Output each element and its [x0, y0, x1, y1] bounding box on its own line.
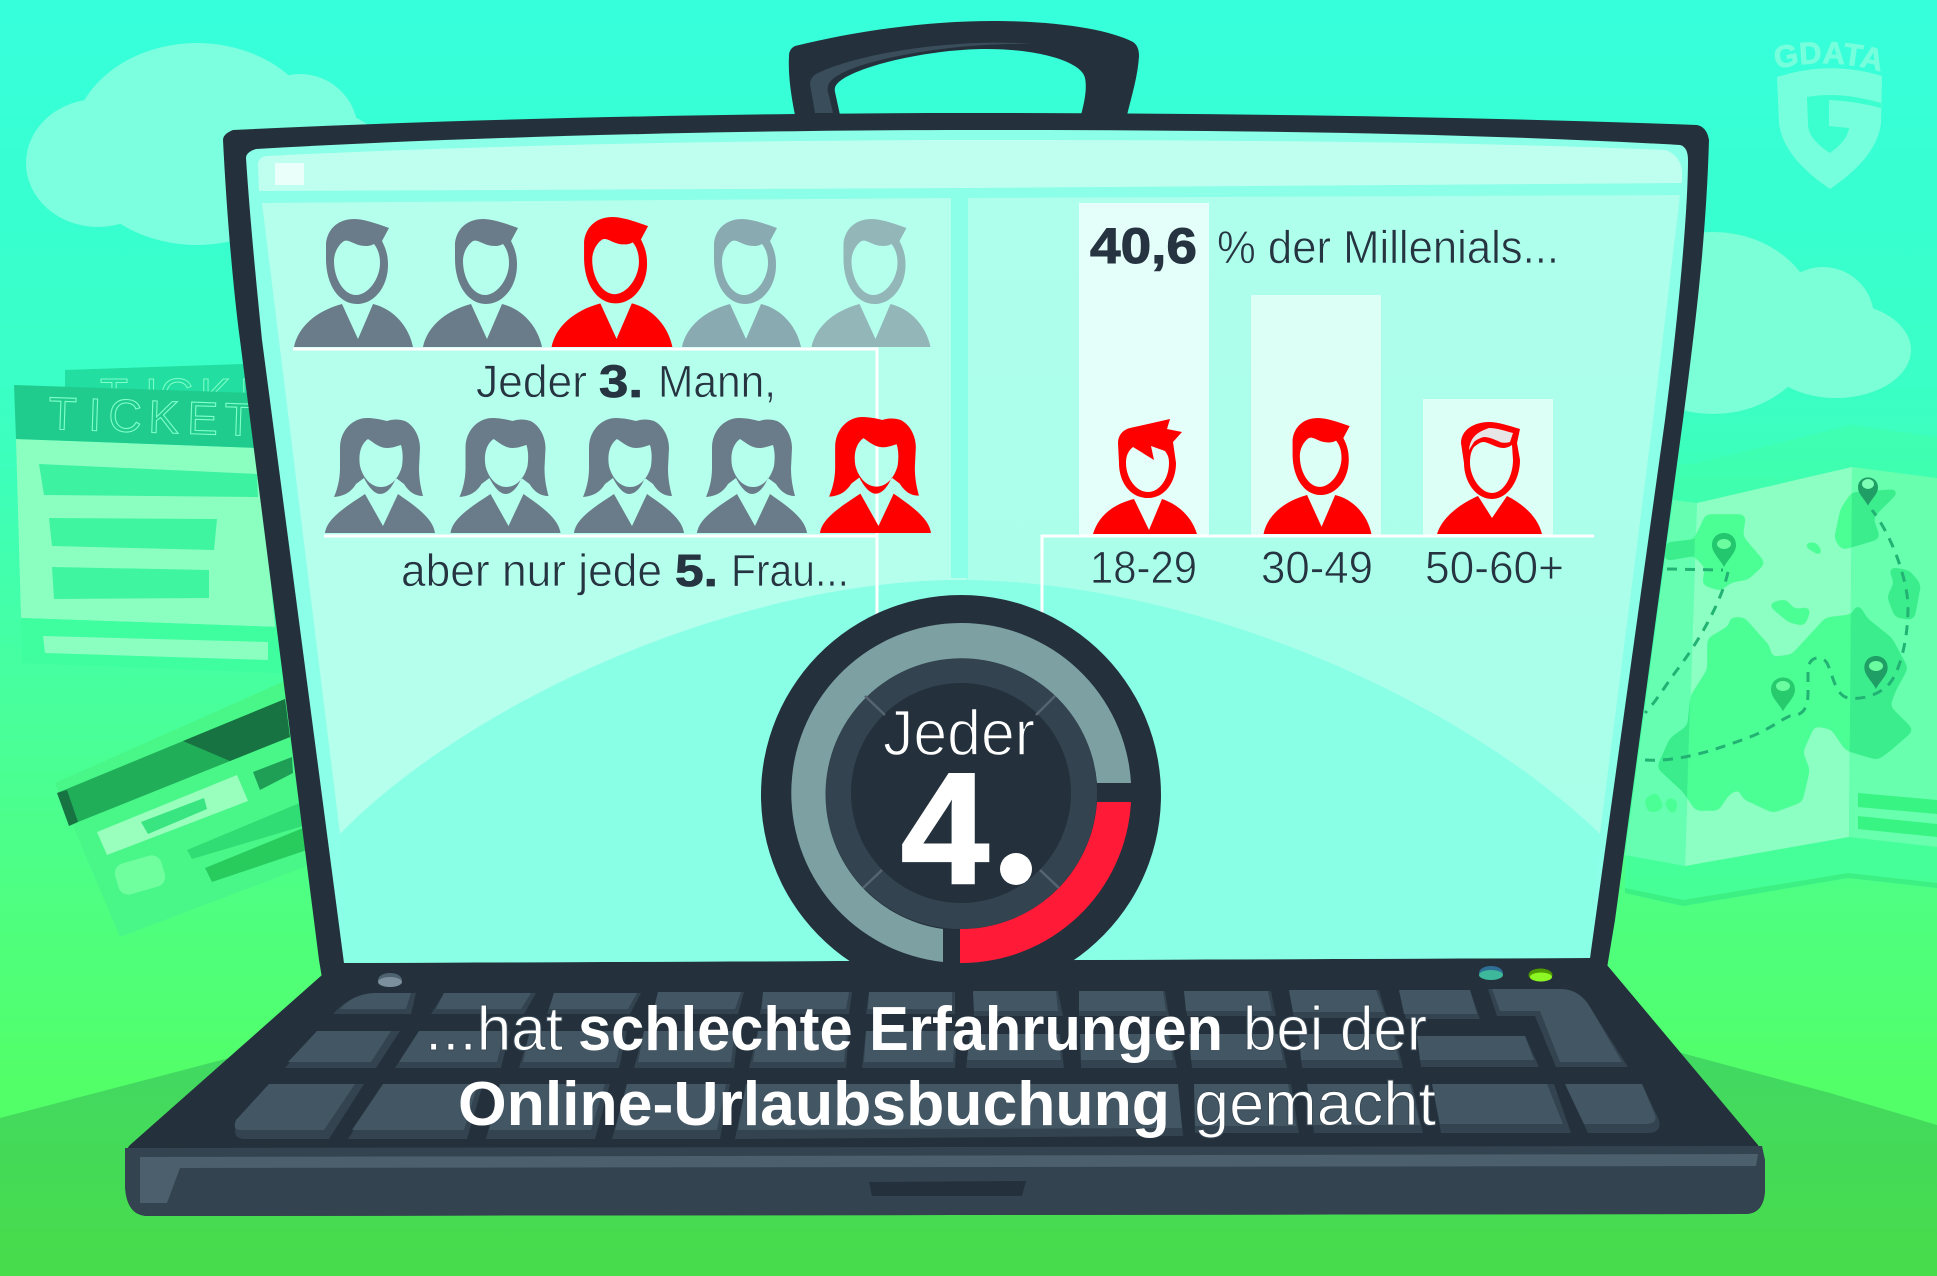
base front	[125, 1146, 1765, 1216]
laptop lid frame	[223, 113, 1709, 980]
label: 18-29: 18-29	[1090, 542, 1197, 593]
donut gauge: Jeder 4.	[761, 595, 1161, 963]
laptop base	[125, 965, 1765, 1216]
base light strip	[140, 1154, 1758, 1203]
women row	[325, 417, 931, 533]
indicator light: blue	[1479, 966, 1503, 980]
indicator light: grey	[378, 973, 402, 987]
screen dome	[340, 580, 1600, 963]
bar: 30-49	[1251, 295, 1381, 536]
text: 4.: .	[1001, 778, 1032, 901]
text: Jeder: Jeder	[883, 697, 1035, 769]
round full stop	[1000, 853, 1032, 885]
chart baseline	[1042, 536, 1594, 620]
headline line 2: gemacht	[1194, 1070, 1436, 1139]
map continents	[1647, 492, 1918, 812]
key shadows	[235, 989, 1660, 1139]
laptop screen	[246, 130, 1688, 963]
indicator light: green	[1528, 968, 1552, 982]
base notch	[869, 1181, 1026, 1196]
cloud: right	[1608, 232, 1911, 414]
text: 4.: 4	[901, 741, 989, 917]
gauge red arc	[960, 802, 1131, 963]
cloud: left	[26, 43, 390, 245]
bar: 50-60+	[1423, 399, 1553, 536]
key faces	[235, 989, 1656, 1130]
illustration: front ticket	[14, 385, 282, 673]
text: aber nur jede 5. Frau: Frau...	[731, 545, 849, 596]
text: 40,6 % der Millenials: % der Millenials...	[1217, 221, 1559, 273]
map text lines	[1858, 793, 1937, 837]
label: 30-49: 30-49	[1261, 542, 1373, 593]
icon: young man	[1093, 419, 1197, 534]
headline	[425, 995, 1436, 1139]
headline line 2: Online-Urlaubsbuchung	[458, 1070, 1170, 1139]
text: Jeder 3. Mann: Jeder	[476, 356, 587, 407]
gauge grey arc	[791, 623, 1131, 962]
headline line 1: ...hat	[425, 995, 563, 1064]
map pins	[1712, 477, 1888, 712]
headline line 1: bei der	[1243, 995, 1427, 1064]
headline line 1: schlechte Erfahrungen	[578, 995, 1223, 1064]
gauge centre	[851, 683, 1071, 903]
laptop handle	[789, 21, 1139, 115]
illustration: front ticket: TICKET	[48, 387, 253, 446]
map continents shaded left fold	[1658, 538, 1695, 798]
illustration: back ticket: TICKET	[100, 369, 303, 421]
map continents shaded right fold	[1850, 490, 1920, 759]
icon: older man with grey hair	[1437, 422, 1542, 534]
text: 40,6 % der Millenials: 40,6	[1090, 218, 1197, 274]
illustration: folded travel map	[1625, 425, 1937, 906]
gauge mid ring	[825, 657, 1097, 929]
map dashed routes	[1645, 510, 1908, 760]
panel: millennials chart background	[968, 195, 1680, 834]
logo: G DATA shield	[1774, 42, 1882, 189]
text: Jeder 3. Mann: Mann,	[658, 356, 776, 407]
screen window button	[275, 163, 304, 185]
icon: middle-aged man	[1264, 418, 1371, 534]
bar: 18-29	[1079, 203, 1209, 536]
baseline men	[293, 349, 877, 620]
panel: gender comparison background	[262, 198, 967, 834]
screen top bar	[258, 140, 1682, 191]
panel: gender comparison	[293, 217, 931, 620]
text: Jeder 3. Mann: 3.	[599, 356, 643, 407]
label: 50-60+: 50-60+	[1425, 542, 1564, 593]
text: aber nur jede 5. Frau: aber nur jede	[401, 545, 662, 596]
men row	[294, 217, 930, 347]
text: aber nur jede 5. Frau: 5.	[675, 545, 718, 596]
logo: G DATA shield: GDATA	[1774, 42, 1880, 72]
panel: millennials bar chart	[1042, 203, 1594, 620]
gauge ticks	[863, 696, 1059, 888]
illustration: credit card	[55, 680, 307, 937]
ground hills	[0, 1010, 1937, 1276]
